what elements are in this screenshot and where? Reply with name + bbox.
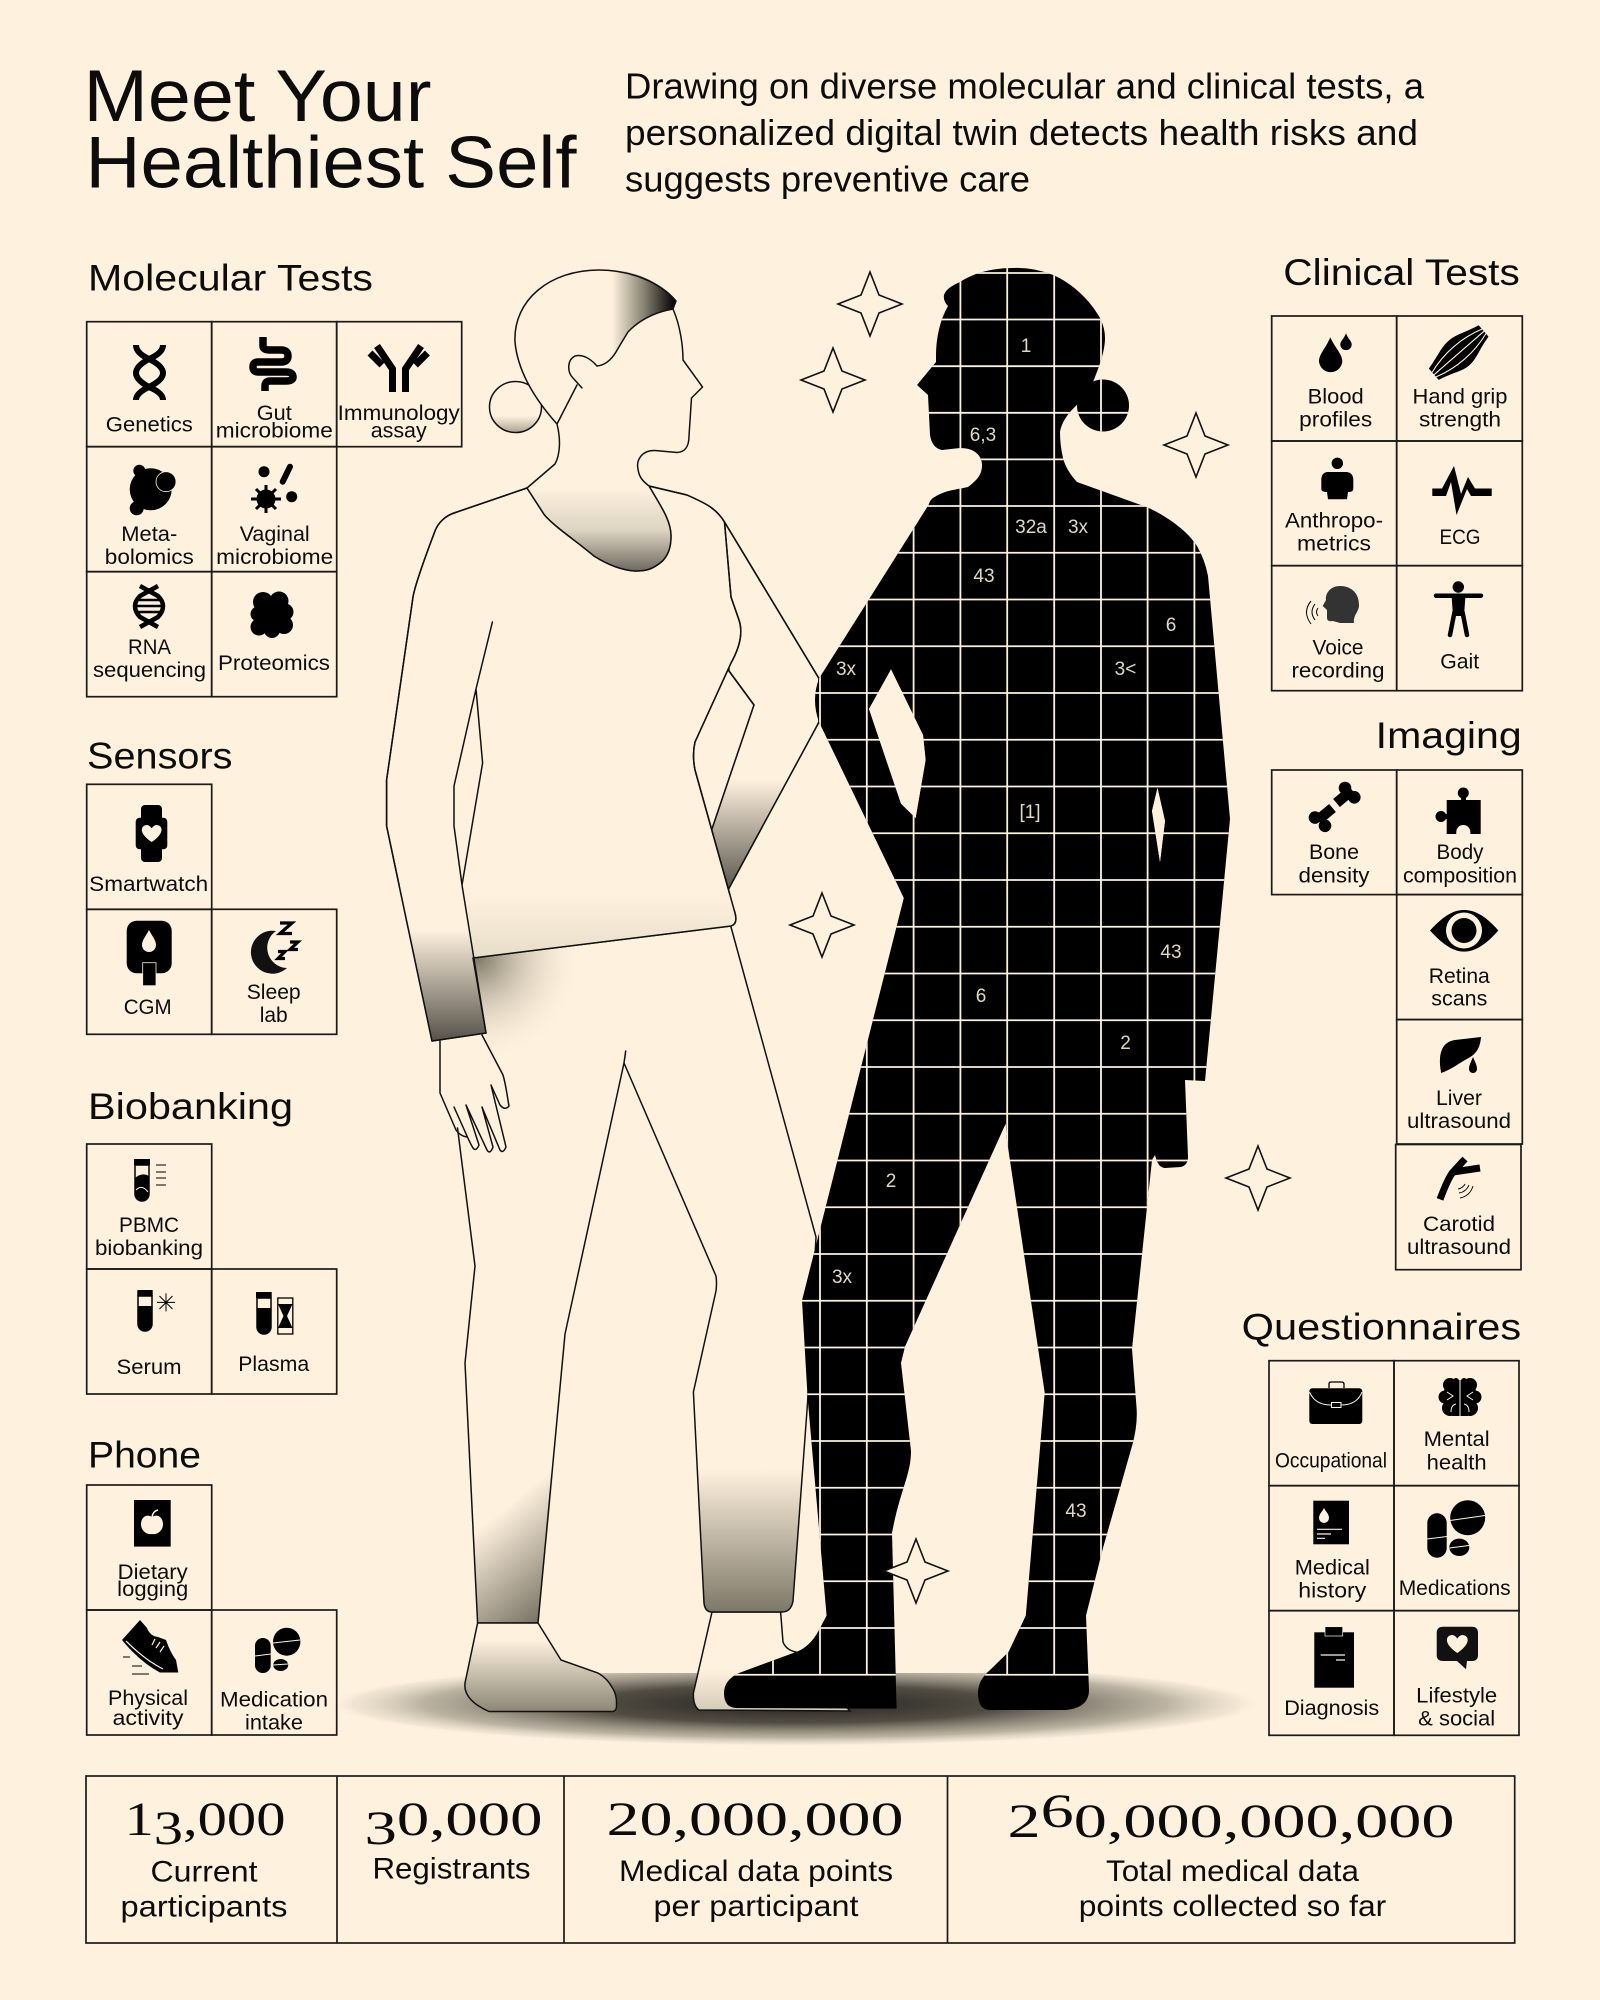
heading: sensors: Sensors — [87, 735, 232, 776]
cell: body composition — [1397, 770, 1522, 895]
stat: total medical data points: 2 — [1008, 1795, 1032, 1848]
cell: carotid ultrasound — [1396, 1144, 1521, 1270]
cell: anthropometrics: metrics — [1297, 532, 1371, 556]
cell: mental health: health — [1427, 1450, 1487, 1474]
cell: anthropometrics: Anthropo- — [1285, 508, 1383, 532]
stat: total medical data points: 0,000,000,000 — [1074, 1795, 1454, 1848]
cell: retina scans — [1397, 895, 1522, 1020]
cell: lifestyle and social — [1394, 1611, 1519, 1735]
stat: registrants — [364, 1793, 542, 1885]
panel: clinical tests — [1272, 252, 1522, 691]
cell: sleep lab: lab — [260, 1003, 288, 1027]
cell: immunology assay: Immunology — [338, 401, 460, 425]
stat: medical data points per participant: per participant — [654, 1890, 859, 1923]
stat: total medical data points: Total medical data — [1106, 1855, 1359, 1888]
cell: smartwatch — [87, 784, 212, 909]
hair bun — [490, 382, 542, 432]
grid numbers: 3x — [832, 1267, 853, 1288]
cell: metabolomics: bolomics — [105, 545, 194, 569]
cell: medication intake — [212, 1610, 337, 1735]
cell: occupational: Occupational — [1275, 1449, 1387, 1473]
cell: smartwatch: Smartwatch — [89, 872, 208, 896]
title: Healthiest Self — [86, 123, 577, 204]
cell: mental health — [1394, 1361, 1519, 1486]
cell: physical activity — [87, 1610, 212, 1735]
cell: carotid ultrasound: ultrasound — [1407, 1235, 1511, 1259]
cell: immunology assay: assay — [371, 418, 427, 442]
cell: metabolomics — [87, 447, 212, 572]
heading: biobanking: Biobanking — [88, 1086, 293, 1127]
grid numbers: 3x — [836, 659, 857, 680]
cell: hand grip strength — [1397, 316, 1522, 441]
cell: vaginal microbiome: Vaginal — [240, 522, 310, 546]
cell: medication intake: intake — [245, 1711, 303, 1735]
cell: cgm: CGM — [124, 995, 172, 1019]
stat: total medical data points: 6 — [1041, 1785, 1074, 1838]
cell: body composition: composition — [1403, 863, 1517, 887]
cell: ecg: ECG — [1440, 525, 1480, 549]
cell: voice recording — [1272, 566, 1397, 691]
cell: medical history — [1269, 1486, 1394, 1611]
title: Meet Your — [84, 56, 432, 137]
cell: metabolomics: Meta- — [121, 522, 177, 546]
cell: medications — [1394, 1486, 1519, 1611]
grid numbers: 2 — [886, 1171, 896, 1192]
grid numbers: 43 — [1065, 1501, 1087, 1522]
cell: sleep lab — [212, 909, 337, 1034]
cell: bone density: density — [1298, 863, 1370, 887]
cell: genetics — [87, 322, 212, 447]
cell: plasma: Plasma — [238, 1352, 309, 1376]
grid numbers: 1 — [1021, 336, 1031, 357]
cell: gut microbiome — [212, 322, 337, 447]
stats bar — [86, 1776, 1515, 1943]
grid numbers: 3< — [1115, 659, 1136, 680]
shirt — [387, 486, 741, 1041]
stat: current participants: participants — [120, 1891, 288, 1924]
cell: serum — [87, 1269, 212, 1394]
stat: medical data points per participant: 20,000,000 — [606, 1793, 904, 1846]
cell: retina scans: scans — [1431, 987, 1487, 1011]
cell: gut microbiome: microbiome — [216, 418, 333, 442]
cell: plasma — [212, 1269, 337, 1394]
cell: liver ultrasound — [1397, 1020, 1522, 1144]
stat: total medical data points: points collected so far — [1079, 1890, 1386, 1923]
cell: lifestyle and social: & social — [1418, 1706, 1495, 1730]
stat: registrants: 0,000 — [397, 1793, 542, 1846]
heading: imaging: Imaging — [1376, 715, 1522, 756]
cell: physical activity: activity — [112, 1706, 184, 1730]
trousers legs — [373, 853, 816, 1623]
cell: mental health: Mental — [1424, 1427, 1490, 1451]
cell: retina scans: Retina — [1429, 964, 1490, 988]
cell: liver ultrasound: ultrasound — [1407, 1109, 1511, 1133]
cell: diagnosis — [1269, 1611, 1394, 1735]
stat: registrants: 3 — [364, 1802, 397, 1855]
cell: voice recording: Voice — [1312, 635, 1364, 659]
sparkles — [790, 272, 1290, 1603]
near foot — [465, 1623, 617, 1712]
cell: dietary logging: logging — [117, 1577, 188, 1601]
cell: vaginal microbiome: microbiome — [216, 545, 333, 569]
stat: current participants: 3 — [154, 1802, 183, 1855]
cell: immunology assay — [337, 322, 462, 447]
cell: medication intake: Medication — [220, 1687, 328, 1711]
cell: gait: Gait — [1440, 649, 1479, 673]
cell: occupational — [1269, 1361, 1394, 1486]
cell: gait — [1397, 566, 1522, 691]
panel: sensors — [87, 735, 337, 1034]
head — [515, 270, 702, 488]
stat: current participants: ,000 — [183, 1793, 286, 1846]
intro text: personalized digital twin detects health risks and — [625, 112, 1418, 153]
cell: genetics: Genetics — [106, 413, 193, 437]
cell: carotid ultrasound: Carotid — [1423, 1212, 1495, 1236]
far foot — [693, 1612, 850, 1711]
panel: biobanking — [87, 1086, 337, 1394]
title — [84, 56, 577, 204]
cell: rna sequencing: sequencing — [93, 658, 206, 682]
cell: pbmc biobanking: PBMC — [119, 1213, 179, 1237]
cell: cgm — [87, 909, 212, 1034]
panel: molecular tests — [87, 258, 462, 697]
intro text — [625, 65, 1425, 200]
cell: medications: Medications — [1399, 1576, 1511, 1600]
stat: current participants — [120, 1793, 288, 1924]
panel: questionnaires — [1242, 1306, 1521, 1735]
cell: body composition: Body — [1436, 840, 1484, 864]
cell: sleep lab: Sleep — [247, 980, 301, 1004]
cell: medical history: Medical — [1295, 1555, 1370, 1579]
stat: current participants: Current — [150, 1856, 258, 1889]
intro text: Drawing on diverse molecular and clinical tests, a — [625, 65, 1425, 106]
stat: registrants: Registrants — [372, 1852, 530, 1885]
grid numbers: 6 — [1166, 615, 1176, 636]
cell: bone density: Bone — [1309, 840, 1359, 864]
far arm — [712, 522, 819, 890]
grid numbers: 6 — [976, 986, 986, 1007]
grid numbers: 43 — [973, 566, 995, 587]
panel: imaging — [1272, 715, 1522, 1270]
figure: black digital twin silhouette with data grid — [700, 260, 1250, 1710]
heading: molecular tests: Molecular Tests — [88, 258, 373, 299]
cell: rna sequencing — [87, 572, 212, 697]
cell: voice recording: recording — [1292, 658, 1384, 682]
cell: diagnosis: Diagnosis — [1284, 1696, 1379, 1720]
cell: blood profiles — [1272, 316, 1397, 441]
stat: medical data points per participant — [606, 1793, 904, 1923]
cell: lifestyle and social: Lifestyle — [1416, 1683, 1497, 1707]
heading: questionnaires: Questionnaires — [1242, 1306, 1521, 1347]
stat: current participants: 1 — [124, 1793, 148, 1846]
cell: blood profiles: Blood — [1308, 384, 1364, 408]
cell: ecg — [1397, 441, 1522, 566]
stat: medical data points per participant: Medical data points — [619, 1855, 893, 1888]
panel: phone — [87, 1435, 337, 1735]
cell: liver ultrasound: Liver — [1436, 1086, 1482, 1110]
cell: gut microbiome: Gut — [257, 401, 292, 425]
grid numbers: 6,3 — [970, 425, 996, 446]
grid numbers: [1] — [1019, 802, 1041, 823]
cell: pbmc biobanking: biobanking — [95, 1236, 203, 1260]
grid numbers: 2 — [1120, 1033, 1131, 1054]
cell: medical history: history — [1298, 1579, 1367, 1603]
hand — [440, 1035, 509, 1152]
grid numbers: 43 — [1160, 942, 1182, 963]
cell: physical activity: Physical — [108, 1686, 188, 1710]
grid numbers — [832, 336, 1182, 1522]
stat: total medical data points — [1008, 1785, 1454, 1923]
cell: anthropometrics — [1272, 441, 1397, 566]
cell: serum: Serum — [116, 1355, 182, 1379]
cell: hand grip strength: Hand grip — [1412, 384, 1508, 408]
figure: outlined woman — [373, 270, 850, 1712]
cell: dietary logging — [87, 1485, 212, 1610]
heading: clinical tests: Clinical Tests — [1283, 252, 1520, 293]
cell: rna sequencing: RNA — [128, 635, 172, 659]
cell: hand grip strength: strength — [1419, 408, 1501, 432]
cell: vaginal microbiome — [212, 447, 337, 572]
intro text: suggests preventive care — [625, 159, 1030, 200]
grid numbers: 3x — [1068, 517, 1089, 538]
grid numbers: 32a — [1015, 517, 1047, 538]
cell: pbmc biobanking — [87, 1144, 212, 1269]
cell: proteomics — [212, 572, 337, 697]
cell: blood profiles: profiles — [1299, 408, 1372, 432]
heading: phone: Phone — [88, 1435, 201, 1476]
ground shadow — [348, 1673, 1242, 1744]
cell: bone density — [1272, 770, 1397, 895]
cell: dietary logging: Dietary — [118, 1560, 188, 1584]
cell: proteomics: Proteomics — [218, 651, 330, 675]
